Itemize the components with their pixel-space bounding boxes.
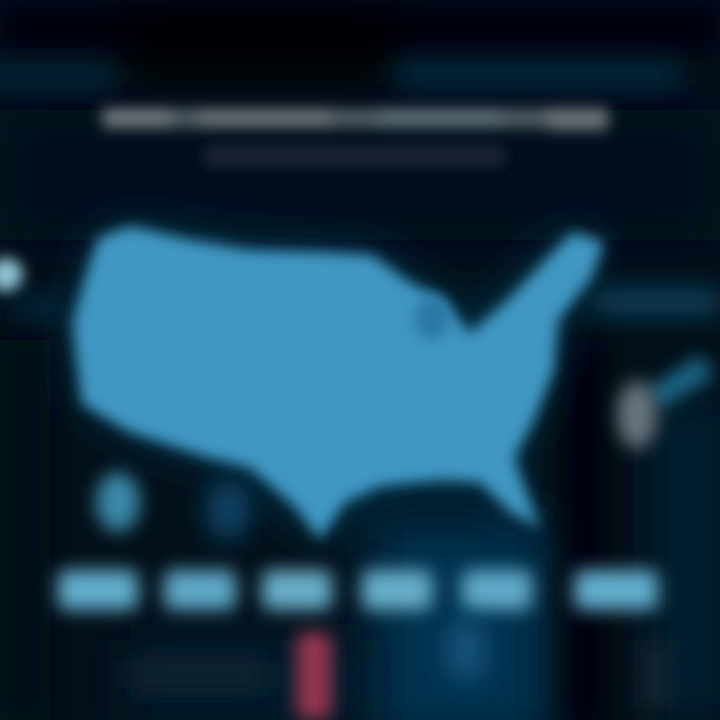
map detail: great lakes <box>414 296 450 340</box>
title (illegible in reference) <box>102 108 608 130</box>
stat 6 <box>574 570 658 610</box>
right streak: upper <box>595 290 720 314</box>
alaska shape <box>96 472 140 532</box>
map: United States <box>72 226 604 540</box>
stat 5 <box>462 570 532 610</box>
red marker <box>296 632 332 720</box>
hawaii shape <box>206 480 250 540</box>
header band: right <box>395 62 680 86</box>
icon: left circle <box>0 258 23 292</box>
stat 2 <box>164 570 236 610</box>
header band: left <box>0 66 115 86</box>
bottom legend: dark bar <box>130 660 265 688</box>
right streak: lower <box>645 355 715 408</box>
glow around map <box>75 228 600 535</box>
stat 1 <box>58 570 138 610</box>
stat 4 <box>362 570 432 610</box>
stat row <box>58 570 658 610</box>
subtitle (illegible in reference) <box>205 146 505 166</box>
grey marker: bottom right <box>645 640 663 710</box>
left streak <box>15 298 65 316</box>
blue marker <box>446 618 486 682</box>
stat 3 <box>262 570 332 610</box>
grey marker <box>617 381 657 449</box>
